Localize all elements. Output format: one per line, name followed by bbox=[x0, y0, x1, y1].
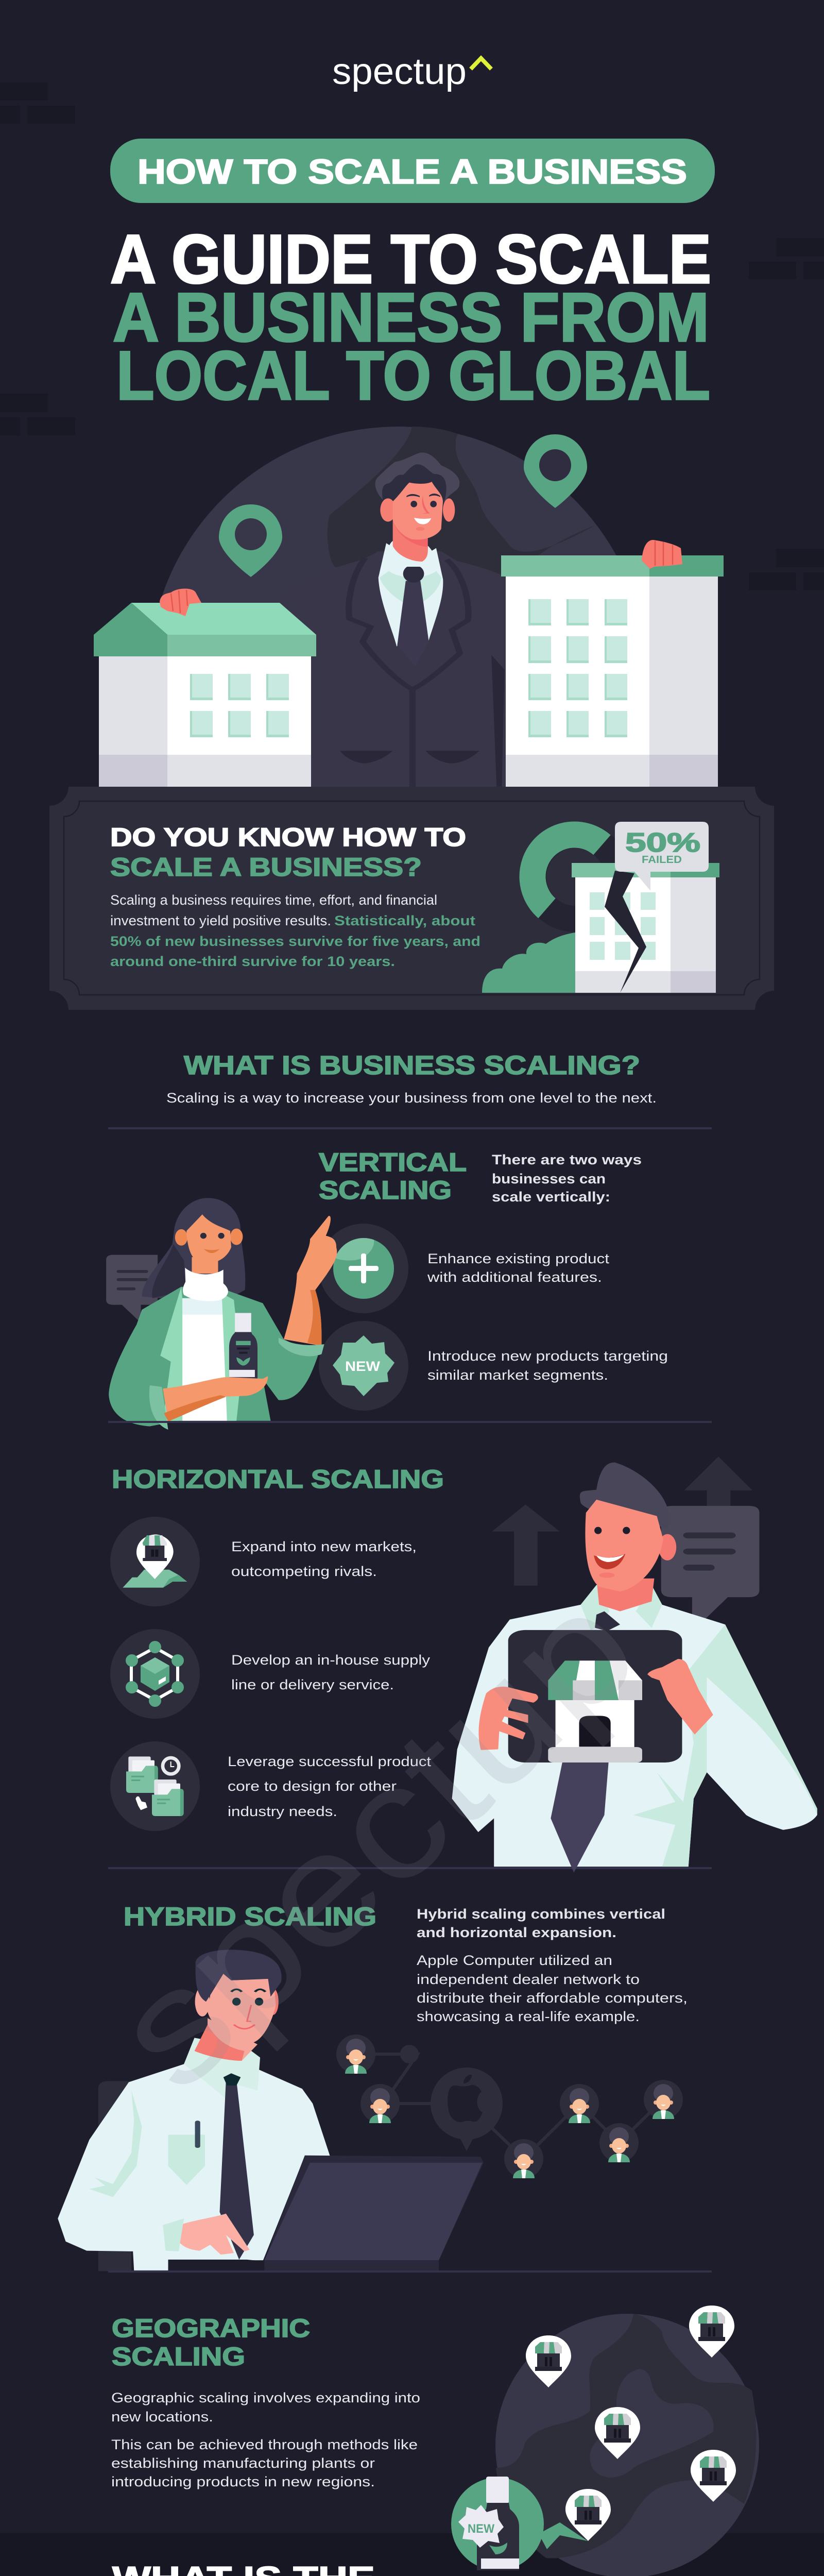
title: A BUSINESS FROM bbox=[113, 279, 709, 356]
hand on tower bbox=[642, 540, 682, 569]
vertical item 2 text: Introduce new products targeting bbox=[427, 1348, 668, 1364]
geographic scaling text: Geographic scaling involves expanding into bbox=[111, 2390, 420, 2405]
horizontal item 2 text: Develop an in-house supply bbox=[231, 1652, 431, 1668]
hero illustration bbox=[94, 427, 724, 925]
illustration: woman with bottle bbox=[106, 1198, 337, 1430]
title: LOCAL TO GLOBAL bbox=[116, 337, 710, 414]
title: A GUIDE TO SCALE bbox=[110, 221, 711, 298]
vertical scaling heading bbox=[319, 1148, 467, 1205]
background arrows bbox=[492, 1456, 752, 1586]
callout: 50% failed: 50% bbox=[625, 828, 700, 858]
laptop bbox=[168, 2156, 484, 2270]
horizontal item 2 text bbox=[231, 1652, 431, 1692]
crack bbox=[605, 871, 646, 993]
geographic scaling text: new locations. bbox=[111, 2409, 213, 2425]
horizontal item 1 text: Expand into new markets, bbox=[231, 1539, 417, 1554]
businessman body bbox=[281, 543, 507, 787]
tie bbox=[551, 1762, 609, 1873]
geographic scaling heading: GEOGRAPHIC bbox=[112, 2314, 310, 2343]
hybrid scaling text: independent dealer network to bbox=[417, 1972, 640, 1987]
store pins bbox=[526, 2306, 736, 2541]
icon: map pin left bbox=[219, 504, 282, 577]
vertical item 2 text bbox=[427, 1348, 668, 1383]
illustration: globe with stores bbox=[451, 2306, 759, 2576]
partner avatars bbox=[336, 2035, 683, 2178]
hybrid scaling text: Apple Computer utilized an bbox=[417, 1953, 612, 1968]
vertical item 1 text bbox=[427, 1251, 610, 1285]
section: what is business scaling bbox=[166, 1050, 657, 1106]
geographic scaling text: establishing manufacturing plants or bbox=[111, 2455, 375, 2471]
network of partners bbox=[336, 2035, 683, 2178]
text block: investment to yield positive results. bbox=[110, 913, 331, 928]
geographic scaling text: This can be achieved through methods like bbox=[111, 2437, 418, 2452]
horizontal item 3 text: industry needs. bbox=[228, 1804, 337, 1819]
heading: DO YOU KNOW HOW TO bbox=[110, 823, 466, 852]
chair bbox=[98, 2081, 131, 2271]
icon: plus bbox=[319, 1224, 408, 1313]
horizontal item 3 text bbox=[228, 1754, 432, 1819]
hands bbox=[478, 1687, 538, 1750]
horizontal item 3 text: core to design for other bbox=[228, 1778, 397, 1794]
decorative bricks bbox=[0, 82, 824, 590]
hybrid scaling heading: HYBRID SCALING bbox=[124, 1902, 376, 1931]
geographic scaling heading: SCALING bbox=[112, 2342, 245, 2371]
illustration: man at laptop bbox=[58, 1950, 484, 2271]
donut chart bbox=[533, 835, 617, 919]
vertical scaling heading: SCALING bbox=[319, 1176, 452, 1205]
speech bubble bbox=[106, 1255, 158, 1323]
hybrid scaling text: Hybrid scaling combines vertical bbox=[417, 1906, 665, 1922]
local house bbox=[94, 588, 316, 787]
watermark: spectup bbox=[80, 1556, 670, 2124]
callout: 50% failed bbox=[615, 822, 709, 891]
text block: Scaling a business requires time, effort, and financial bbox=[110, 892, 437, 908]
global tower bbox=[501, 540, 724, 787]
heading: SCALE A BUSINESS? bbox=[110, 853, 422, 882]
geographic scaling heading bbox=[112, 2314, 310, 2371]
heading bbox=[110, 823, 466, 882]
pocket bbox=[168, 2135, 205, 2185]
title bbox=[110, 221, 711, 414]
illustration: man holding tablet bbox=[452, 1456, 817, 1873]
panel: do you know bbox=[49, 787, 774, 1010]
eyebrow pill: HOW TO SCALE A BUSINESS bbox=[138, 152, 687, 191]
globe bbox=[495, 2314, 759, 2576]
lower section background bbox=[0, 2533, 824, 2576]
icon: folders bbox=[110, 1741, 200, 1831]
section: what is business scaling: Scaling is a way to increase your business from one level to the next. bbox=[166, 1090, 657, 1106]
logo: spectup: spectup bbox=[332, 51, 467, 92]
vertical scaling intro bbox=[492, 1152, 642, 1205]
text block: 50% of new businesses survive for five years, and bbox=[110, 934, 480, 949]
horizontal item 3 text: Leverage successful product bbox=[228, 1754, 432, 1769]
bottle bbox=[229, 1313, 258, 1384]
hybrid scaling text: distribute their affordable computers, bbox=[417, 1990, 688, 2006]
hybrid scaling text bbox=[417, 1906, 688, 2024]
shirt bbox=[452, 1585, 817, 1867]
speech bubble bbox=[661, 1506, 759, 1632]
illustration: failed building bbox=[482, 822, 719, 993]
vertical item 2 text: similar market segments. bbox=[427, 1367, 608, 1383]
text block: Statistically, about bbox=[334, 913, 475, 928]
eyebrow pill bbox=[110, 139, 715, 203]
globe bbox=[149, 427, 647, 925]
geographic scaling text bbox=[111, 2390, 420, 2489]
vertical scaling heading: VERTICAL bbox=[319, 1148, 467, 1177]
horizontal item 1 text bbox=[231, 1539, 417, 1579]
icon: map pin right bbox=[524, 434, 587, 508]
icon: new badge bbox=[319, 1321, 408, 1411]
icon: new badge: NEW bbox=[345, 1359, 381, 1374]
hand on house bbox=[160, 588, 201, 616]
vertical item 1 text: with additional features. bbox=[427, 1269, 602, 1285]
text block: around one-third survive for 10 years. bbox=[110, 954, 395, 969]
hybrid scaling text: and horizontal expansion. bbox=[417, 1925, 616, 1940]
shop bbox=[548, 1660, 642, 1762]
horizontal item 2 text: line or delivery service. bbox=[231, 1677, 394, 1692]
geographic scaling text: introducing products in new regions. bbox=[111, 2474, 375, 2489]
callout: 50% failed: FAILED bbox=[642, 854, 682, 866]
icon: market pin bbox=[110, 1517, 200, 1606]
vertical scaling intro: scale vertically: bbox=[492, 1189, 610, 1205]
hybrid scaling text: showcasing a real-life example. bbox=[417, 2009, 640, 2024]
vertical item 1 text: Enhance existing product bbox=[427, 1251, 610, 1266]
vertical scaling intro: businesses can bbox=[492, 1171, 606, 1187]
hand bbox=[174, 2214, 250, 2255]
new product callout: NEW bbox=[468, 2522, 494, 2536]
tablet bbox=[508, 1630, 682, 1762]
businessman head bbox=[375, 452, 459, 567]
horizontal item 1 text: outcompeting rivals. bbox=[231, 1564, 377, 1579]
vertical scaling intro: There are two ways bbox=[492, 1152, 642, 1167]
section: what is business scaling: WHAT IS BUSINESS SCALING? bbox=[184, 1050, 640, 1080]
horizontal scaling heading: HORIZONTAL SCALING bbox=[112, 1465, 444, 1494]
head bbox=[580, 1463, 676, 1612]
text block bbox=[110, 892, 480, 969]
head bbox=[195, 1950, 282, 2061]
icon: supply network bbox=[110, 1629, 200, 1719]
apple bubble bbox=[431, 2067, 503, 2151]
new product callout bbox=[451, 2477, 588, 2570]
tie bbox=[220, 2080, 254, 2260]
shirt bbox=[58, 2051, 330, 2270]
